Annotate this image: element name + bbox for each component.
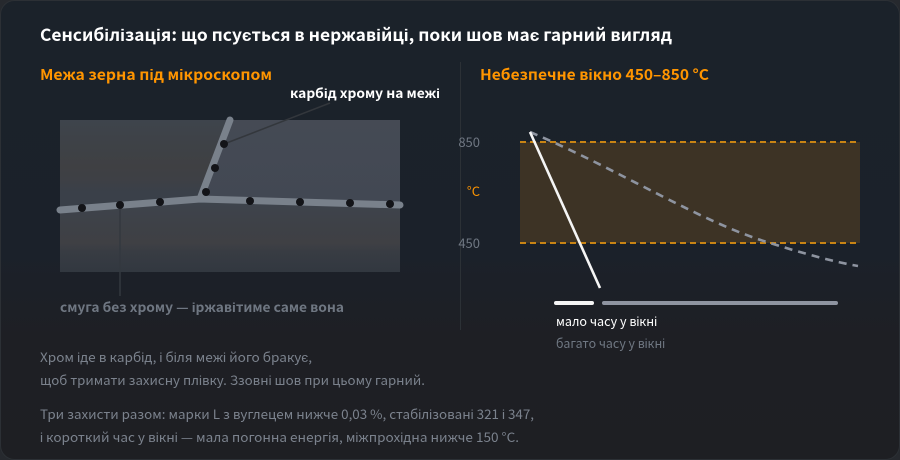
grain: bottom: [60, 199, 400, 272]
title: Сенсибілізація: що псується в нержавійці, поки шов має гарний вигляд: [40, 21, 672, 46]
label: depleted band: смуга без хрому — іржавітиме саме вона: [60, 297, 344, 316]
legend text: much time: багато часу у вікні: [556, 333, 665, 352]
text block: protections: і короткий час у вікні — мала погонна енергія, міжпрохідна нижче 150 °C.: [40, 427, 519, 446]
carbide particles: [78, 140, 394, 212]
grain: upper right: [200, 120, 400, 205]
leader line: carbide: [224, 103, 330, 144]
heading: danger window: Небезпечне вікно 450–850 °C: [480, 64, 709, 85]
axis unit: °C: [467, 181, 480, 200]
label: carbide: карбід хрому на межі: [290, 83, 440, 102]
axis label 850: 850: [458, 132, 480, 151]
grain: upper left: [60, 120, 230, 210]
zone lower limit: [520, 242, 860, 244]
slow cooling curve: [530, 132, 858, 266]
text block: explanation: щоб тримати захисну плівку. Ззовні шов при цьому гарний.: [40, 370, 425, 389]
zone upper limit: [520, 141, 860, 143]
text block: protections: [40, 404, 534, 446]
legend swatch: long: [602, 301, 838, 305]
text block: explanation: [40, 347, 425, 389]
legend swatch: short: [554, 301, 594, 305]
text block: explanation: Хром іде в карбід, і біля межі його бракує,: [40, 347, 312, 366]
danger zone: [520, 142, 860, 243]
divider between columns: [460, 62, 462, 330]
heading: grain boundary: Межа зерна під мікроскопом: [40, 64, 272, 85]
fast cooling curve: [530, 132, 600, 288]
chart: temperature window: [520, 132, 860, 288]
chart: grain boundary micrograph: [60, 103, 400, 296]
axis label 450: 450: [458, 233, 480, 252]
legend text: little time: мало часу у вікні: [556, 311, 657, 330]
text block: protections: Три захисти разом: марки L з вуглецем нижче 0,03 %, стабілізовані 321 і 347,: [40, 404, 534, 423]
leader line: depleted band: [119, 205, 121, 296]
grain boundary lines: [60, 120, 400, 210]
